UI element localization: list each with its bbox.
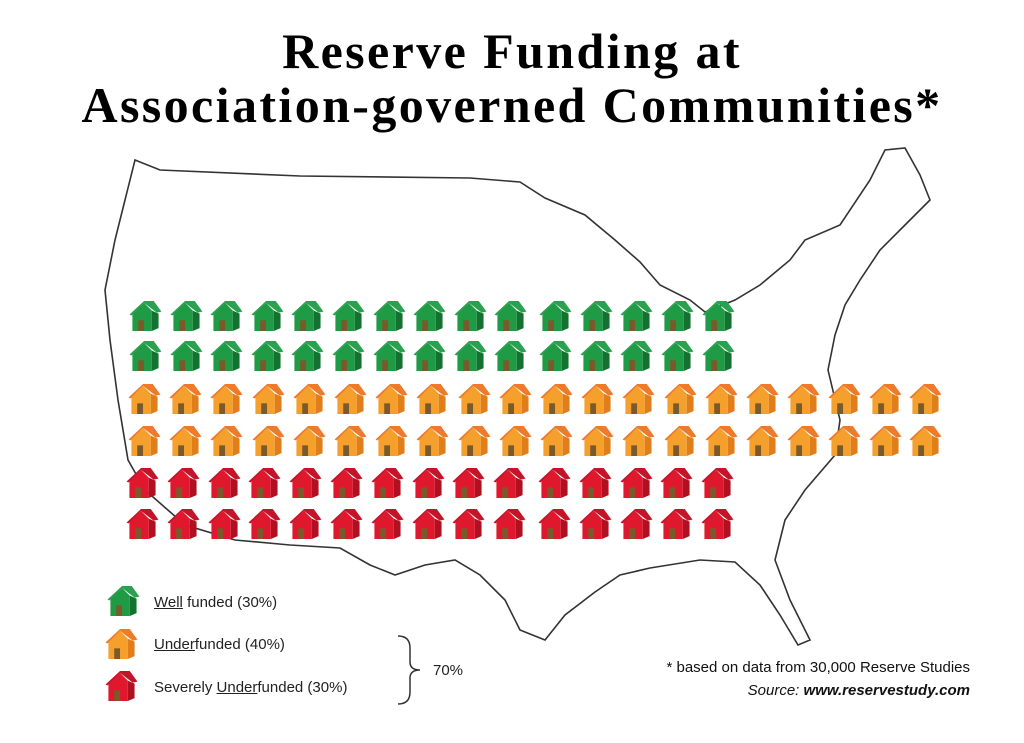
houses: well funded rows [130,301,734,371]
label: 70%: 70% [433,662,463,679]
bracket: 70% [398,636,420,704]
footnote: Source: www.reservestudy.com [748,682,970,699]
legend icons [106,586,139,701]
footnote [666,659,970,699]
legend text: underfunded: Underfunded (40%) [154,636,285,653]
map: US outline [105,148,930,645]
legend text: severely underfunded: Severely Underfunded (30%) [154,679,347,696]
legend text: well funded: Well funded (30%) [154,594,277,611]
footnote: * based on data from 30,000 Reserve Studies [666,659,970,676]
houses: severely underfunded rows [126,468,733,539]
title: Reserve Funding at [282,23,742,79]
title: Association-governed Communities* [81,77,943,133]
houses: underfunded rows [128,384,941,456]
title [81,23,943,133]
